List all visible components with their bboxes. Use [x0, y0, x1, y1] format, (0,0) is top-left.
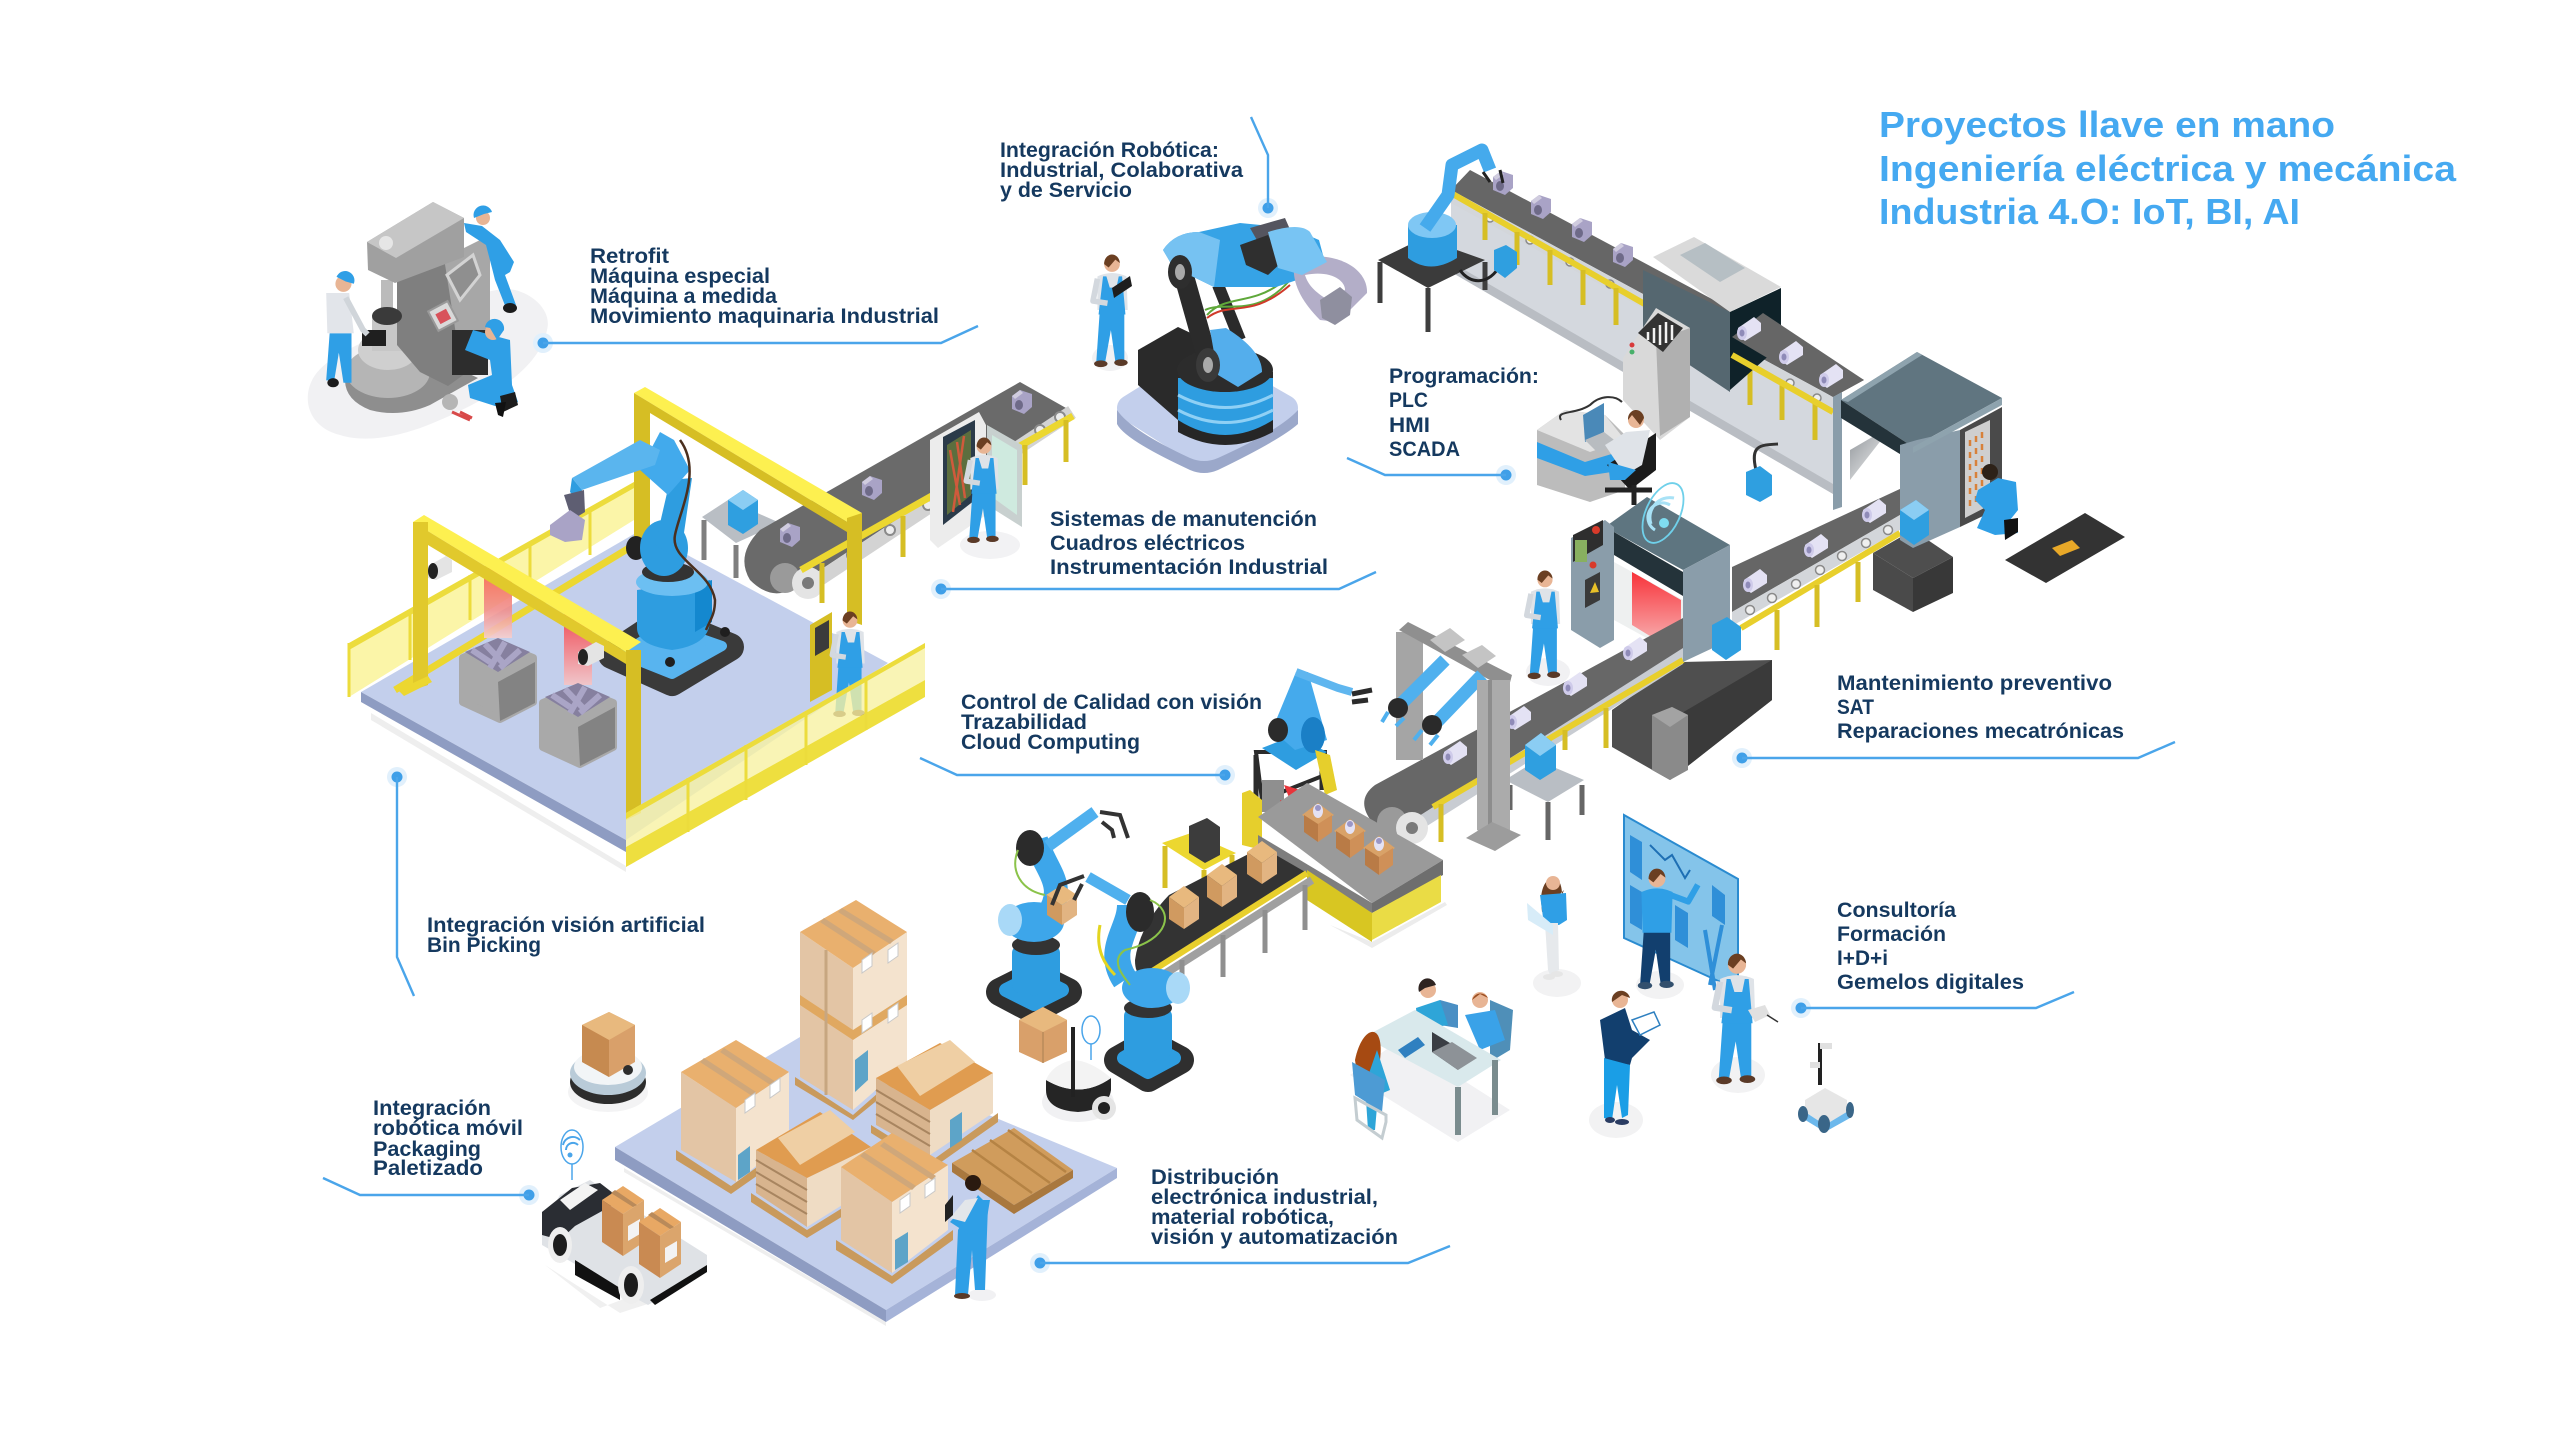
robot two	[1052, 876, 1190, 1078]
table with blue box	[702, 490, 780, 578]
worker left	[326, 271, 368, 387]
callout: quality control: Cloud Computing	[961, 731, 1140, 754]
sensor box with cable	[1460, 245, 1517, 281]
callout: retrofit: Movimiento maquinaria Industrial	[590, 305, 939, 328]
small gradient under gate	[1850, 425, 1893, 480]
callout: retrofit: Máquina especial	[590, 265, 770, 288]
top belt	[1451, 170, 1864, 397]
worker with tablet	[1092, 255, 1132, 371]
callout: maintenance: Reparaciones mecatrónicas	[1837, 720, 2124, 743]
scene: red inspection gate and conveyor	[1364, 477, 1772, 851]
machine under conveyor	[1612, 660, 1772, 780]
front arch	[398, 515, 641, 820]
electrical cabinet	[930, 412, 1022, 559]
box	[1019, 1007, 1067, 1063]
callout: distribution: material robótica,	[1151, 1206, 1334, 1229]
blue box right	[1712, 617, 1741, 660]
bin 2	[543, 683, 615, 766]
yellow rail mid	[1433, 660, 1683, 807]
scene: conveyor with electrical cabinet	[702, 382, 1073, 603]
chair back	[1490, 1000, 1513, 1062]
callout: consulting: Gemelos digitales	[1837, 971, 2024, 994]
callout: handling systems: Instrumentación Industrial	[1050, 556, 1328, 579]
yellow rail	[801, 416, 1073, 570]
machine	[345, 202, 490, 413]
bin 1	[463, 638, 535, 721]
standing woman	[1527, 876, 1581, 997]
gantry	[1382, 622, 1521, 851]
scene: packing table and small robot	[1135, 672, 1447, 1000]
stack three	[871, 1040, 998, 1170]
gate body	[1833, 392, 1842, 510]
callout: programming	[1347, 365, 1539, 485]
belt after gate	[1732, 313, 1864, 397]
wires	[1205, 280, 1290, 315]
parts	[1012, 390, 1032, 414]
worker crouching	[465, 319, 518, 417]
hanging sensor box	[1746, 444, 1778, 502]
rail	[1451, 190, 1833, 412]
robot base	[612, 620, 730, 682]
callout: distribution	[1030, 1166, 1450, 1273]
callout: handling systems: Sistemas de manutención	[1050, 508, 1317, 531]
worker at cabinet	[966, 438, 999, 543]
worker with controller	[1711, 954, 1778, 1093]
yellow side table	[1162, 818, 1236, 905]
packing table	[1258, 783, 1447, 948]
callout: consulting	[1791, 899, 2074, 1018]
callout: mobile robotics: Integración	[373, 1097, 491, 1120]
tall stack	[795, 900, 912, 1120]
title: Proyectos llave en mano	[1879, 104, 2335, 145]
robot table	[1378, 238, 1485, 332]
cameras	[428, 556, 604, 666]
box pedestal	[1873, 530, 1953, 612]
tablet	[1398, 1037, 1425, 1058]
floor blob	[308, 289, 548, 439]
stack five	[836, 1133, 953, 1284]
callout: retrofit: Retrofit	[590, 245, 669, 268]
worker with clipboard	[945, 1175, 996, 1301]
callout: mobile robotics: robótica móvil	[373, 1117, 523, 1140]
callout: robotic integration: Integración Robótica:	[1000, 139, 1219, 162]
callout: consulting: I+D+i	[1837, 947, 1888, 970]
rear arch	[634, 387, 862, 625]
suited man with tablet	[1589, 991, 1660, 1138]
floor	[361, 530, 888, 840]
blue box on line	[1900, 500, 1929, 545]
stack four	[751, 1110, 876, 1238]
stack two	[676, 1040, 794, 1194]
seated operator and chair	[1605, 410, 1656, 505]
black conveyor	[1135, 847, 1307, 974]
scene: mobile robot with box	[1019, 1007, 1116, 1122]
boxes on conveyor	[1247, 841, 1277, 884]
loose pallet	[952, 1128, 1073, 1214]
wifi tag	[1082, 1016, 1100, 1060]
callout: artificial vision: Integración visión artificial	[427, 914, 705, 937]
callout: maintenance: Mantenimiento preventivo	[1837, 672, 2112, 695]
callout: artificial vision	[387, 767, 705, 996]
floor	[615, 1037, 1117, 1310]
laptop	[1432, 1032, 1477, 1070]
robot arm	[550, 432, 715, 630]
base	[1046, 1078, 1111, 1112]
HMI panel	[1623, 308, 1690, 440]
yellow rail	[1451, 193, 1833, 412]
worker in cell	[832, 612, 865, 717]
arm link	[1218, 285, 1240, 340]
callout: maintenance	[1732, 672, 2175, 768]
callout: programming: PLC	[1389, 389, 1428, 412]
yellow rail after gate	[1732, 355, 1833, 412]
callout: robotic integration	[1000, 117, 1278, 218]
lower belt	[1732, 488, 1902, 612]
people at table back	[1416, 978, 1505, 1050]
parts on belt	[1493, 171, 1513, 195]
small blue robot on stand	[1256, 672, 1372, 810]
rollers	[847, 412, 1065, 560]
mid belt	[1364, 618, 1683, 831]
callout: distribution: electrónica industrial,	[1151, 1186, 1378, 1209]
title: Ingeniería eléctrica y mecánica	[1879, 148, 2457, 189]
robot pedestal	[636, 562, 712, 650]
tools	[442, 394, 472, 420]
callout: consulting: Formación	[1837, 923, 1946, 946]
blue forearm	[1163, 223, 1327, 287]
callout: retrofit: Máquina a medida	[590, 285, 777, 308]
callout: quality control: Trazabilidad	[961, 711, 1087, 734]
gate 3 rear	[1614, 562, 1683, 658]
carried box	[1046, 885, 1077, 925]
table	[1364, 1010, 1501, 1135]
callout: retrofit	[533, 245, 978, 353]
callout: mobile robotics: Paletizado	[373, 1157, 483, 1180]
rear fence	[349, 482, 634, 697]
front fence	[626, 643, 925, 867]
scene: large gate with technician	[1732, 352, 2125, 650]
callout: quality control: Control de Calidad con visión	[961, 691, 1262, 714]
callout: programming: Programación:	[1389, 365, 1539, 388]
pole	[1071, 1027, 1075, 1097]
side table with box	[1505, 733, 1584, 840]
disc robot with box	[568, 1012, 648, 1112]
automated guided vehicle	[542, 1180, 707, 1313]
technician	[1975, 464, 2018, 540]
callout: mobile robotics	[323, 1097, 539, 1205]
motor	[1240, 218, 1327, 275]
yellow arch	[1242, 790, 1262, 850]
floor shadow	[371, 713, 626, 872]
callout: distribution: Distribución	[1151, 1166, 1279, 1189]
rover	[1798, 1043, 1854, 1133]
callout: handling systems	[931, 508, 1376, 599]
callout: robotic integration: Industrial, Colaborativa	[1000, 159, 1243, 182]
worker at gate	[1526, 571, 1570, 686]
title	[1879, 104, 2457, 232]
robot on table	[1408, 150, 1503, 266]
worker top	[464, 206, 517, 313]
black mat	[2005, 513, 2125, 583]
scene: consulting and training team	[1350, 815, 1854, 1142]
robot one	[998, 812, 1128, 1010]
seated woman	[1352, 1032, 1390, 1138]
title: Industria 4.O: IoT, BI, AI	[1879, 191, 2300, 232]
meeting floor shadow	[1350, 1040, 1510, 1142]
scanner	[1262, 780, 1300, 815]
operator desk	[1537, 397, 1625, 502]
base	[1138, 327, 1273, 420]
callout: distribution: visión y automatización	[1151, 1226, 1398, 1249]
callout: mobile robotics: Packaging	[373, 1138, 481, 1161]
scene: top conveyor line	[1378, 150, 1893, 505]
red vision beams	[484, 568, 592, 685]
scene: retrofit machine with workers	[308, 202, 548, 439]
packed boxes	[1302, 803, 1334, 842]
gripper	[1294, 256, 1367, 322]
callout: programming: HMI	[1389, 414, 1430, 437]
scene: two blue robots	[998, 812, 1190, 1078]
scene: robot cell with vision bin picking	[349, 387, 925, 872]
scene: pallets and logistics	[542, 900, 1117, 1326]
belt	[744, 382, 1066, 593]
floor shadow	[624, 1168, 886, 1326]
floor side band	[1451, 195, 1833, 492]
callout: maintenance: SAT	[1837, 696, 1874, 719]
yellow rail lower	[1741, 533, 1900, 628]
callout: artificial vision: Bin Picking	[427, 934, 541, 957]
floor pad	[1130, 362, 1285, 455]
scene: robotic integration arm	[1117, 218, 1367, 473]
pulley	[770, 563, 800, 593]
callout: consulting: Consultoría	[1837, 899, 1956, 922]
callout: quality control	[920, 691, 1262, 785]
gate one	[1643, 237, 1781, 392]
operator panel	[810, 612, 832, 702]
wifi tag on vehicle	[561, 1130, 583, 1180]
callout: robotic integration: y de Servicio	[1000, 179, 1132, 202]
man at screen	[1636, 869, 1698, 999]
gate 3 head	[1605, 497, 1730, 570]
wifi badge	[1634, 477, 1692, 549]
digital twin screen	[1624, 815, 1738, 990]
callout: handling systems: Cuadros eléctricos	[1050, 532, 1245, 555]
callout: programming: SCADA	[1389, 438, 1460, 461]
